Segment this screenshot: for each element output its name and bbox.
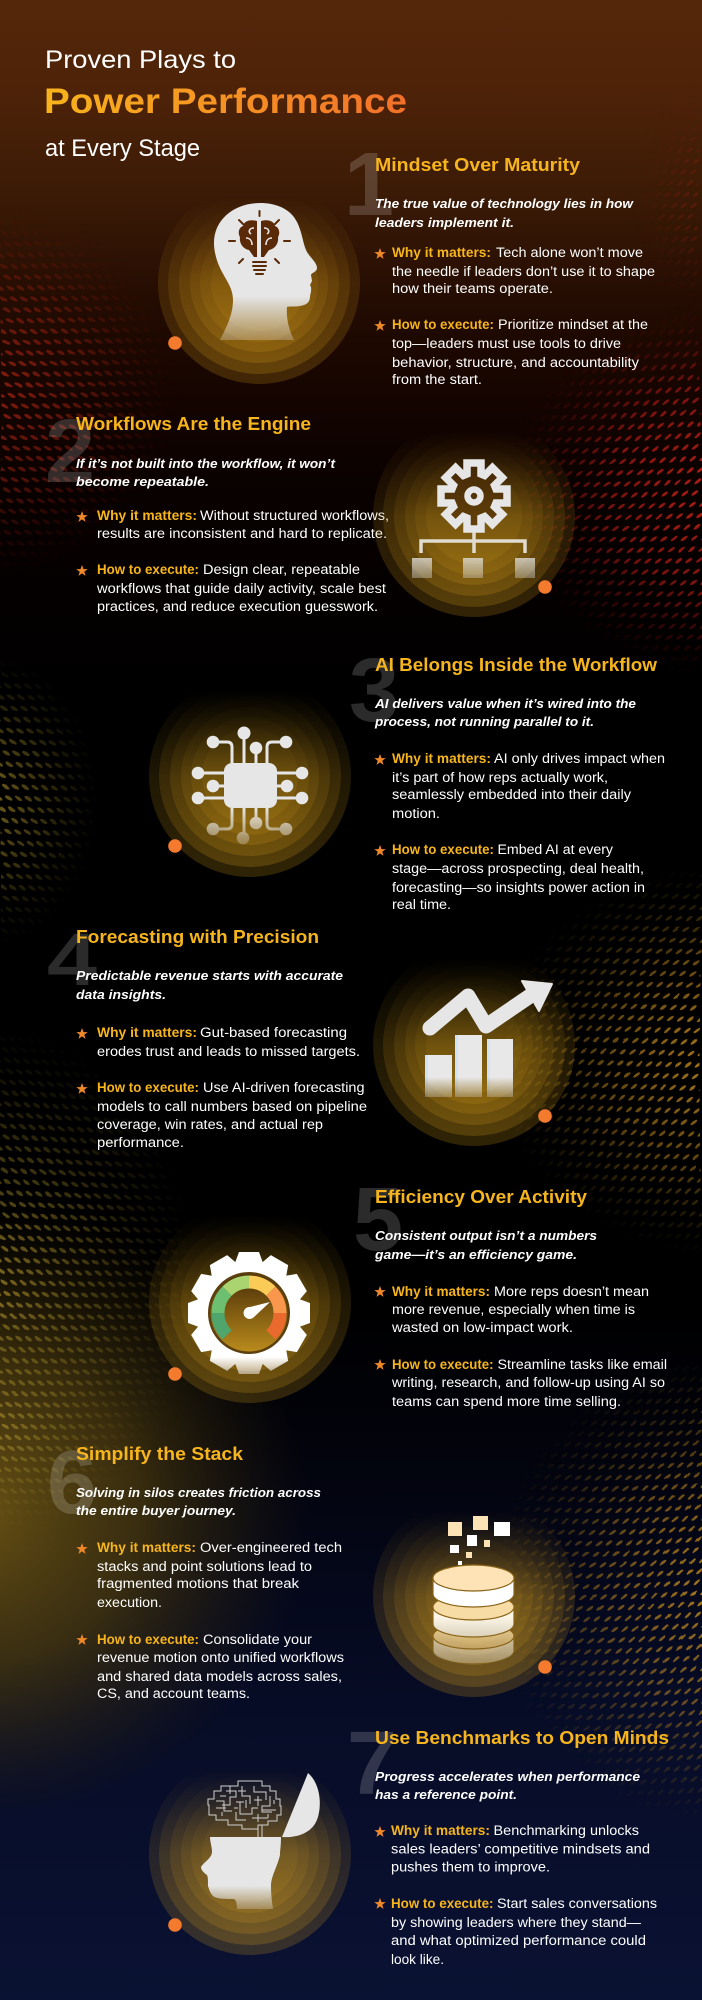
how to execute: CS, and account teams. bbox=[97, 1686, 250, 1701]
how to execute: and shared data models across sales, bbox=[97, 1669, 342, 1684]
dot bbox=[168, 336, 182, 350]
number 4: 4 bbox=[47, 918, 97, 1001]
how to execute: stage—across prospecting, deal health, bbox=[392, 861, 644, 876]
why it matters bbox=[76, 508, 389, 541]
number 1: 1 bbox=[344, 135, 394, 235]
panel: 5 Efficiency Over Activity bbox=[149, 1170, 667, 1409]
dot bbox=[538, 1660, 552, 1674]
how to execute: forecasting—so insights power action in bbox=[392, 880, 645, 895]
icon: gauge gear bbox=[188, 1252, 310, 1374]
rings bbox=[373, 440, 575, 617]
why it matters bbox=[374, 751, 665, 821]
why it matters bbox=[374, 1823, 650, 1874]
icon: gear with workflow tree bbox=[412, 463, 535, 578]
number 5: 5 bbox=[353, 1170, 403, 1270]
panel: 2 Workflows Are the Engine bbox=[45, 402, 575, 617]
how to execute bbox=[76, 562, 386, 614]
why it matters: results are inconsistent and hard to replicate. bbox=[97, 526, 387, 541]
title: at Every Stage bbox=[45, 135, 200, 162]
why it matters: fragmented motions that break bbox=[97, 1576, 299, 1591]
how to execute: models to call numbers based on pipeline bbox=[97, 1099, 367, 1114]
statement: has a reference point. bbox=[375, 1787, 517, 1802]
why it matters: Tech alone won’t move bbox=[496, 245, 643, 260]
why it matters: Why it matters: bbox=[97, 1025, 197, 1040]
why it matters: it’s part of how reps actually work, bbox=[392, 770, 608, 785]
statement: the entire buyer journey. bbox=[76, 1503, 236, 1518]
statement: AI delivers value when it’s wired into the bbox=[374, 696, 636, 711]
how to execute: look like. bbox=[391, 1952, 444, 1967]
how to execute: Use AI-driven forecasting bbox=[203, 1080, 364, 1095]
panel: 6 Simplify the Stack bbox=[47, 1433, 575, 1701]
why it matters: motion. bbox=[392, 806, 440, 821]
dot bbox=[168, 839, 182, 853]
statement: data insights. bbox=[76, 987, 166, 1002]
number 3: 3 bbox=[349, 641, 399, 741]
number 7: 7 bbox=[347, 1714, 397, 1814]
heading: Simplify the Stack bbox=[76, 1443, 244, 1464]
statement: Consistent output isn’t a numbers bbox=[375, 1228, 597, 1243]
icon: rising chart bbox=[425, 981, 552, 1097]
why it matters: the needle if leaders don’t use it to shape bbox=[392, 264, 655, 279]
icon: open head with maze brain bbox=[201, 1773, 320, 1909]
how to execute: Consolidate your bbox=[203, 1632, 313, 1647]
why it matters: how their teams operate. bbox=[392, 281, 553, 296]
why it matters: more revenue, especially when time is bbox=[392, 1302, 635, 1317]
how to execute: performance. bbox=[97, 1135, 184, 1150]
rings bbox=[149, 698, 351, 877]
why it matters: stacks and point solutions lead to bbox=[97, 1559, 312, 1574]
how to execute bbox=[374, 1896, 657, 1967]
why it matters: Why it matters: bbox=[391, 1823, 490, 1838]
why it matters: Why it matters: bbox=[97, 508, 197, 523]
rings bbox=[149, 1778, 351, 1955]
dot bbox=[168, 1367, 182, 1381]
statement: Predictable revenue starts with accurate bbox=[76, 968, 343, 983]
how to execute: workflows that guide daily activity, scale best bbox=[96, 581, 386, 596]
how to execute: How to execute: bbox=[392, 1357, 494, 1372]
statement bbox=[76, 968, 343, 1002]
how to execute bbox=[374, 842, 645, 912]
heading: Efficiency Over Activity bbox=[375, 1186, 588, 1207]
statement bbox=[374, 696, 636, 729]
dot bbox=[168, 1918, 182, 1932]
panel: 4 Forecasting with Precision bbox=[47, 918, 575, 1150]
how to execute: How to execute: bbox=[97, 1632, 199, 1647]
why it matters: Why it matters: bbox=[392, 1284, 490, 1299]
how to execute: How to execute: bbox=[97, 1080, 199, 1095]
heading: Use Benchmarks to Open Minds bbox=[375, 1727, 669, 1748]
how to execute bbox=[374, 1357, 667, 1409]
statement: If it’s not built into the workflow, it won’t bbox=[76, 456, 336, 471]
heading: Workflows Are the Engine bbox=[76, 413, 311, 434]
number 2: 2 bbox=[45, 402, 95, 502]
why it matters: Gut-based forecasting bbox=[200, 1025, 347, 1040]
why it matters bbox=[374, 1284, 649, 1335]
title: Proven Plays to bbox=[45, 46, 236, 74]
how to execute: writing, research, and follow-up using AI so bbox=[391, 1375, 665, 1390]
title: Power Performance bbox=[44, 82, 407, 121]
why it matters: pushes them to improve. bbox=[391, 1860, 550, 1874]
statement: Solving in silos creates friction across bbox=[76, 1485, 321, 1500]
why it matters: seamlessly embedded into their daily bbox=[392, 787, 631, 802]
why it matters: sales leaders’ competitive mindsets and bbox=[391, 1842, 650, 1856]
how to execute bbox=[374, 317, 648, 387]
how to execute: practices, and reduce execution guesswork. bbox=[97, 599, 378, 614]
title bbox=[44, 46, 407, 162]
why it matters bbox=[76, 1025, 360, 1059]
icon: head with brain bulb bbox=[214, 203, 317, 340]
rings bbox=[149, 1224, 351, 1403]
why it matters bbox=[374, 245, 655, 296]
how to execute: by showing leaders where they stand— bbox=[391, 1915, 642, 1930]
why it matters: Without structured workflows, bbox=[200, 508, 389, 523]
heading: Mindset Over Maturity bbox=[375, 154, 581, 175]
how to execute: teams can spend more time selling. bbox=[392, 1394, 621, 1409]
how to execute: from the start. bbox=[392, 372, 482, 387]
how to execute: Start sales conversations bbox=[497, 1896, 657, 1911]
number 6: 6 bbox=[47, 1433, 97, 1533]
how to execute: Prioritize mindset at the bbox=[498, 317, 648, 332]
why it matters bbox=[76, 1540, 342, 1610]
why it matters: execution. bbox=[97, 1595, 162, 1610]
heading: AI Belongs Inside the Workflow bbox=[375, 654, 658, 675]
statement: become repeatable. bbox=[76, 474, 209, 489]
rings bbox=[373, 1520, 575, 1697]
statement: game—it’s an efficiency game. bbox=[374, 1247, 577, 1262]
heading: Forecasting with Precision bbox=[76, 926, 319, 947]
icon: database with data blocks bbox=[433, 1516, 514, 1664]
statement bbox=[375, 196, 634, 230]
icon: AI chip bbox=[192, 726, 308, 844]
how to execute bbox=[76, 1632, 344, 1701]
how to execute: How to execute: bbox=[97, 562, 199, 577]
panel: 7 Use Benchmarks to Open Minds bbox=[149, 1714, 669, 1967]
rings bbox=[373, 968, 575, 1146]
how to execute: Streamline tasks like email bbox=[498, 1357, 667, 1372]
dot bbox=[538, 1109, 552, 1123]
how to execute: Embed AI at every bbox=[498, 842, 613, 857]
how to execute: How to execute: bbox=[391, 1896, 494, 1911]
why it matters: Why it matters: bbox=[97, 1540, 196, 1555]
how to execute bbox=[76, 1080, 367, 1150]
why it matters: Benchmarking unlocks bbox=[494, 1823, 639, 1838]
statement: The true value of technology lies in how bbox=[375, 196, 634, 211]
statement bbox=[375, 1769, 640, 1802]
panel: 3 AI Belongs Inside the Workflow bbox=[149, 641, 665, 912]
statement: leaders implement it. bbox=[375, 215, 514, 230]
why it matters: wasted on low-impact work. bbox=[391, 1320, 573, 1335]
dot bbox=[538, 580, 552, 594]
why it matters: AI only drives impact when bbox=[494, 751, 665, 766]
how to execute: How to execute: bbox=[392, 842, 494, 857]
how to execute: Design clear, repeatable bbox=[203, 562, 360, 577]
statement: process, not running parallel to it. bbox=[374, 714, 594, 729]
how to execute: How to execute: bbox=[392, 317, 494, 332]
how to execute: coverage, win rates, and actual rep bbox=[97, 1117, 323, 1132]
how to execute: behavior, structure, and accountability bbox=[392, 355, 639, 370]
why it matters: Why it matters: bbox=[392, 751, 491, 766]
why it matters: Why it matters: bbox=[392, 245, 491, 260]
statement: Progress accelerates when performance bbox=[375, 1769, 640, 1784]
statement bbox=[374, 1228, 597, 1262]
why it matters: Over-engineered tech bbox=[200, 1540, 342, 1555]
how to execute: top—leaders must use tools to drive bbox=[392, 336, 621, 351]
statement bbox=[76, 1485, 321, 1518]
how to execute: and what optimized performance could bbox=[391, 1933, 646, 1948]
rings bbox=[158, 208, 360, 384]
why it matters: erodes trust and leads to missed targets. bbox=[97, 1044, 360, 1059]
statement bbox=[76, 456, 336, 489]
why it matters: More reps doesn’t mean bbox=[494, 1284, 649, 1299]
panel: 1 Mindset Over Maturity bbox=[158, 135, 655, 387]
how to execute: revenue motion onto unified workflows bbox=[97, 1650, 344, 1665]
how to execute: real time. bbox=[392, 897, 451, 912]
